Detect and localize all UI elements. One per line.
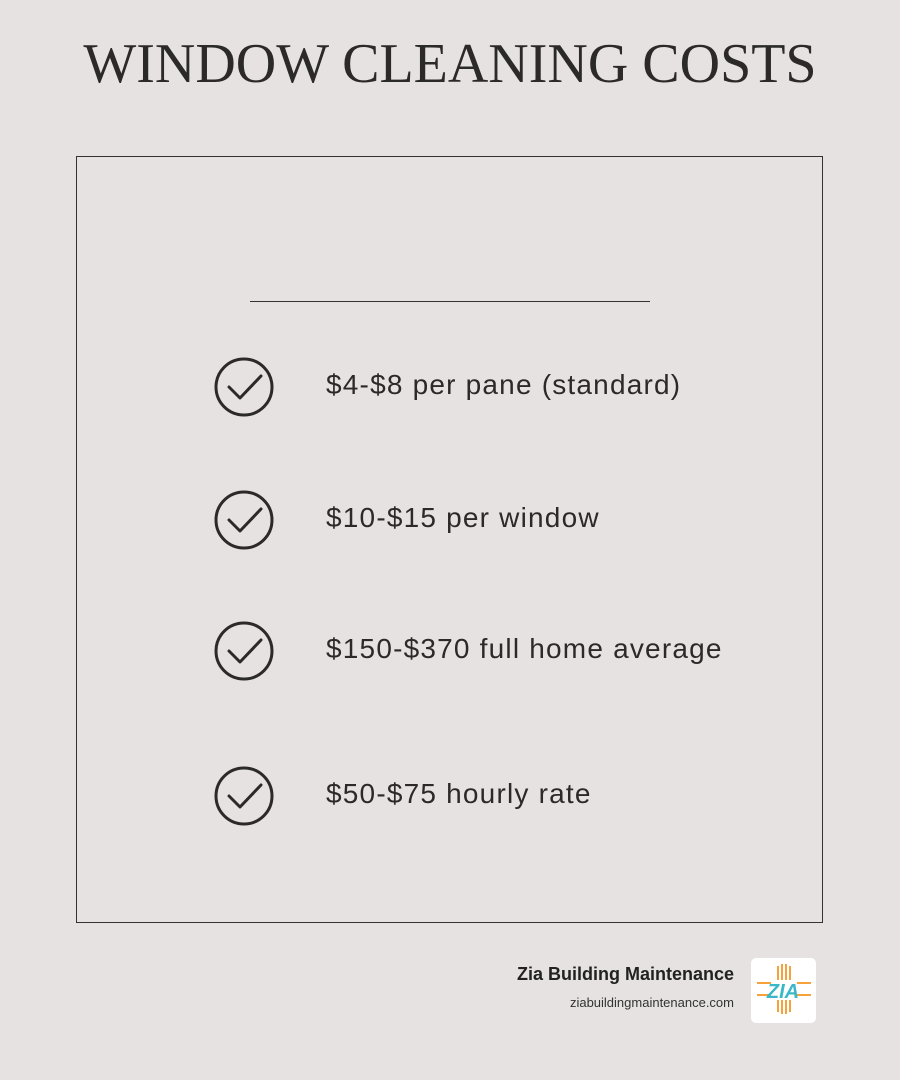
item: per window <box>214 490 600 550</box>
logo <box>751 958 816 1023</box>
footer brand text: ziabuildingmaintenance.com <box>570 995 734 1010</box>
item: per window: $10-$15 per window <box>326 502 600 533</box>
footer brand text <box>517 964 734 1010</box>
item: full home: $150-$370 full home average <box>326 633 723 664</box>
panel: cost list <box>76 156 823 923</box>
logo: ZIA <box>766 981 799 1003</box>
divider line <box>250 301 650 302</box>
footer brand text: Zia Building Maintenance <box>517 964 734 984</box>
item: per pane <box>214 358 681 416</box>
item: hourly rate <box>214 766 592 826</box>
item: full home <box>214 622 723 680</box>
item: hourly rate: $50-$75 hourly rate <box>326 778 592 809</box>
title: WINDOW CLEANING COSTS <box>83 33 817 95</box>
item: per pane: $4-$8 per pane (standard) <box>326 369 681 400</box>
